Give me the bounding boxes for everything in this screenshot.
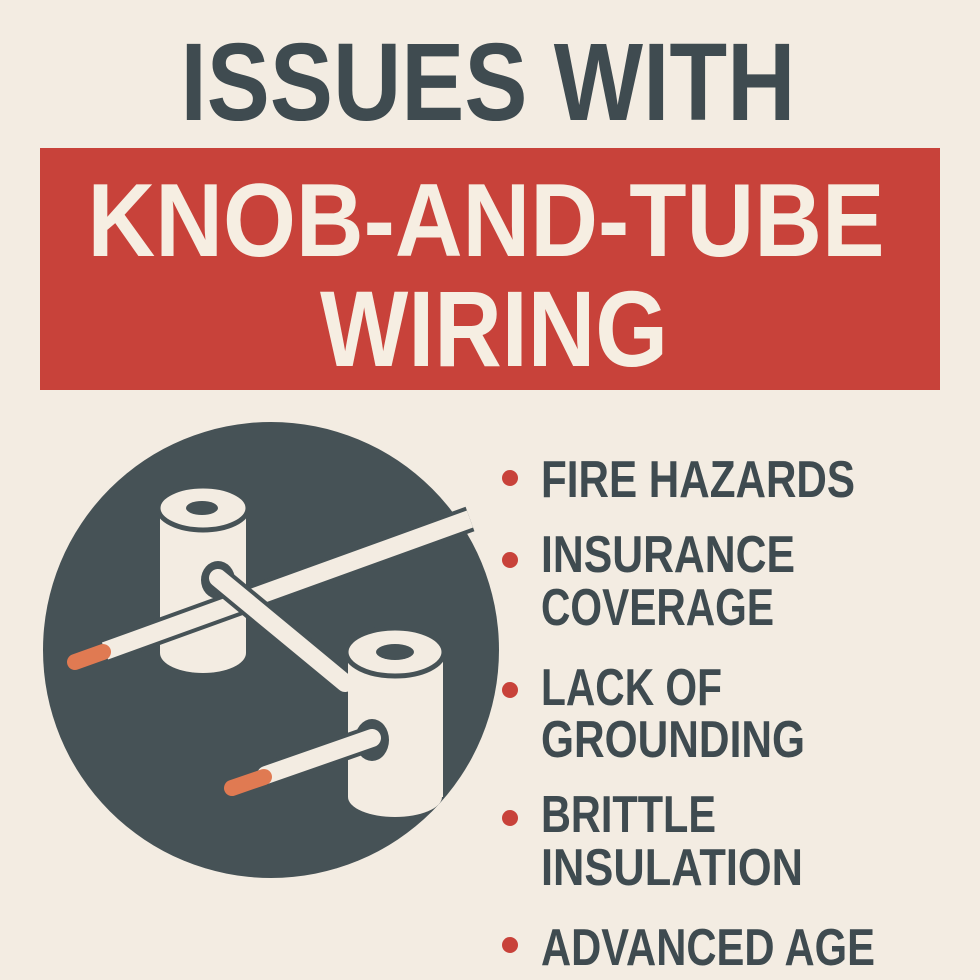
bullet: brittle insulation bbox=[502, 786, 803, 897]
bullet: fire hazards: FIRE HAZARDS bbox=[541, 451, 855, 509]
long wire bbox=[75, 519, 470, 662]
bullet: insurance coverage: COVERAGE bbox=[541, 579, 774, 637]
issues list bbox=[502, 451, 875, 977]
bullet: insurance coverage bbox=[502, 526, 795, 637]
title: ISSUES WITH bbox=[180, 21, 796, 144]
bullet: lack of grounding: GROUNDING bbox=[541, 711, 805, 769]
short wire bbox=[232, 738, 372, 788]
bullet: insurance coverage: INSURANCE bbox=[541, 526, 795, 584]
bullet: lack of grounding: LACK OF bbox=[541, 659, 722, 717]
diagonal wire bbox=[218, 578, 345, 683]
bullet: lack of grounding bbox=[502, 659, 805, 769]
bullet: advanced age: ADVANCED AGE bbox=[541, 919, 875, 977]
illustration: knob and tube bbox=[43, 422, 499, 878]
bullet: brittle insulation: BRITTLE bbox=[541, 786, 716, 844]
knob 1 bbox=[158, 486, 248, 673]
banner text bbox=[88, 163, 884, 389]
banner bbox=[40, 148, 940, 390]
banner text: WIRING bbox=[320, 268, 668, 389]
knob 2 bbox=[346, 628, 444, 817]
bullet: brittle insulation: INSULATION bbox=[541, 839, 803, 897]
banner text: KNOB-AND-TUBE bbox=[88, 163, 884, 279]
